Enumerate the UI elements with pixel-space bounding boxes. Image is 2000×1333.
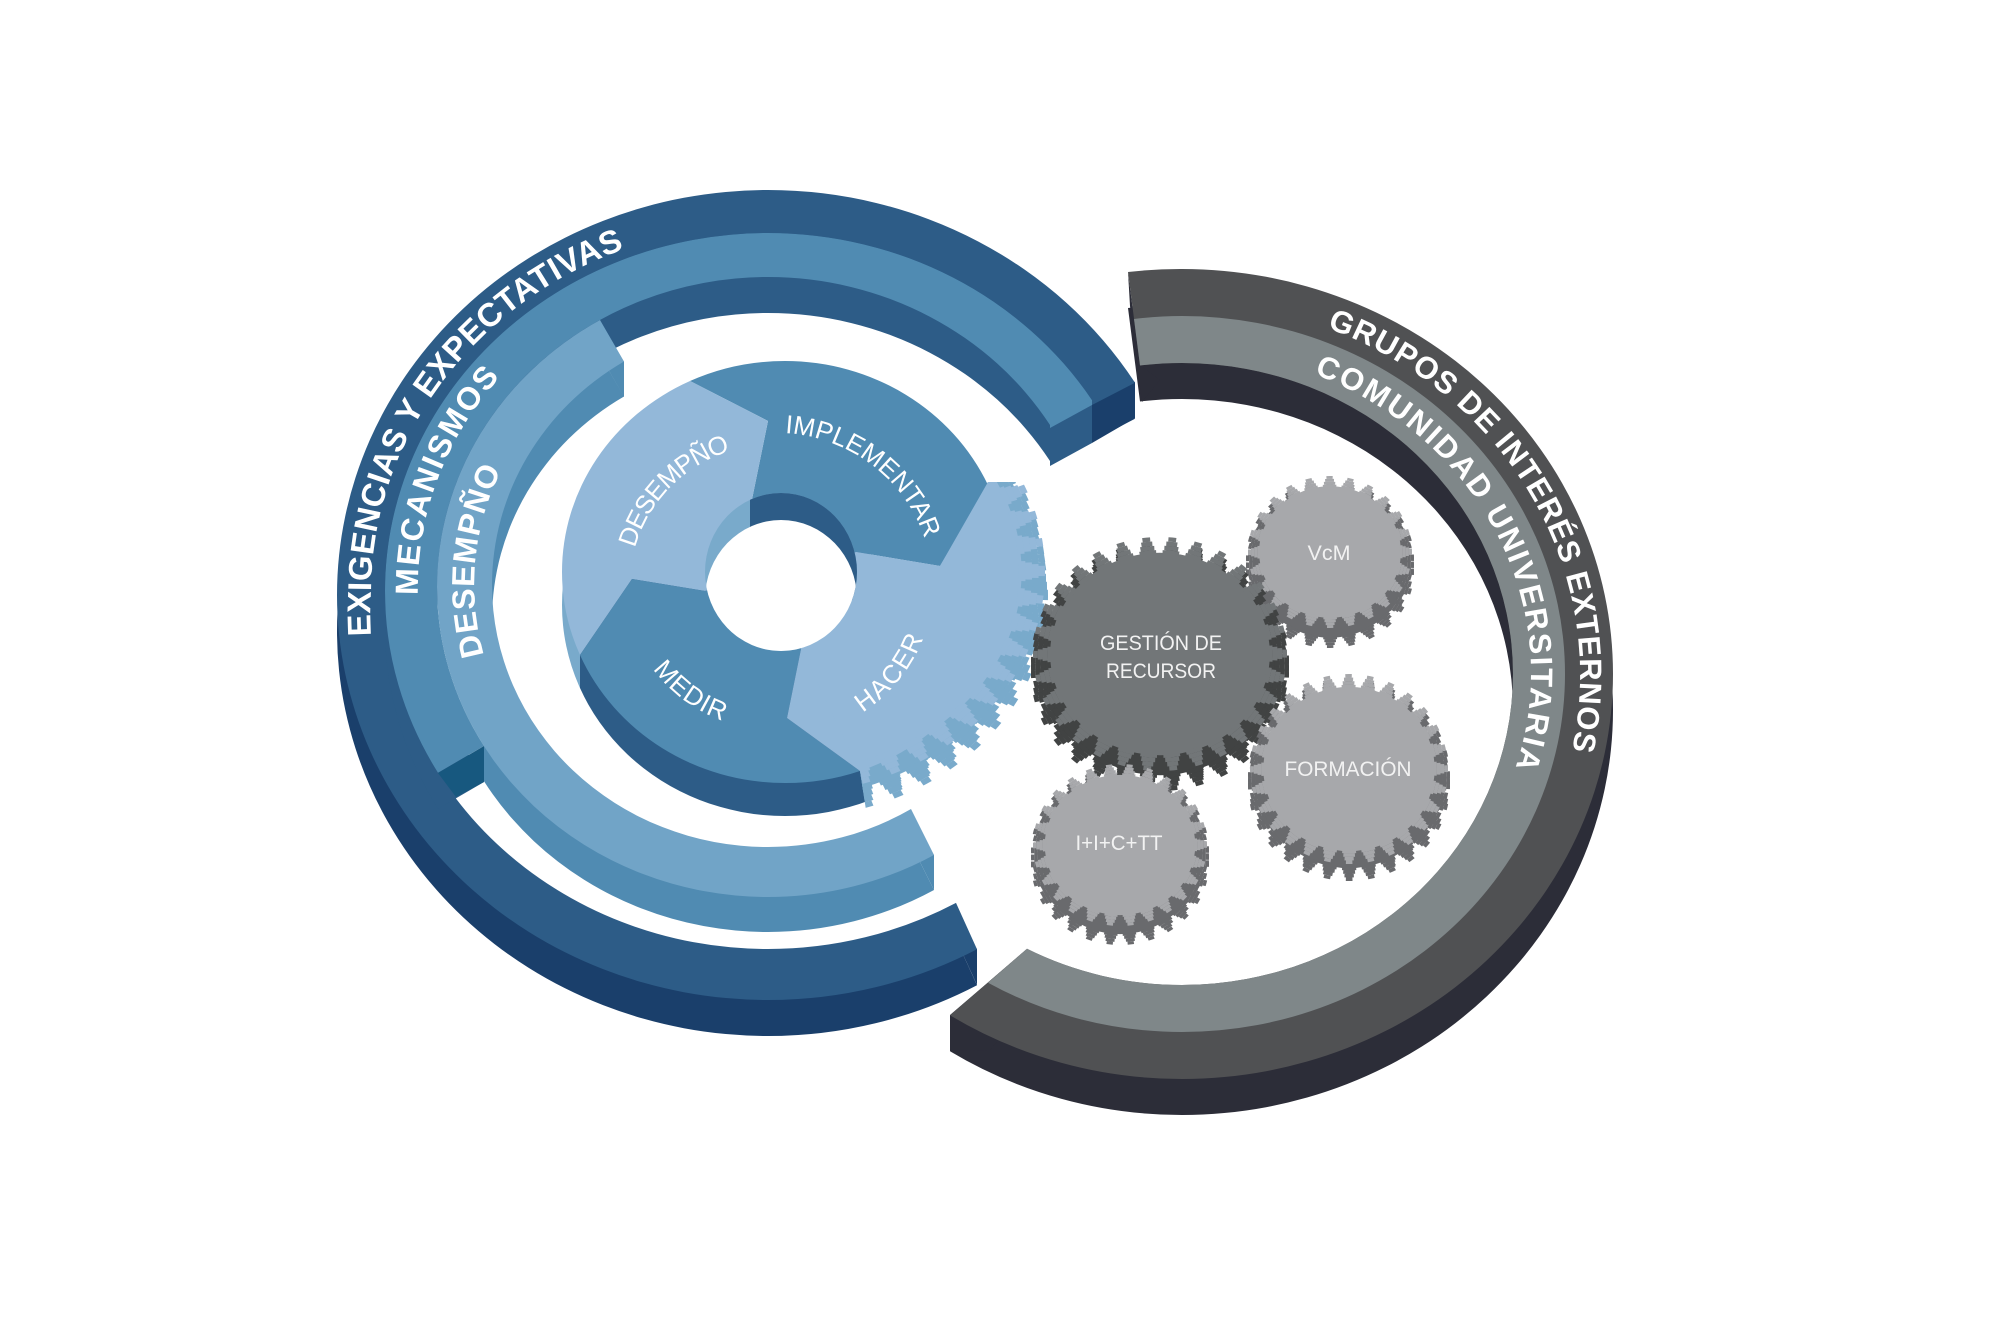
- middle ring: mecanismos: [385, 233, 1092, 773]
- wheel hole: [705, 493, 857, 651]
- gear: formación: FORMACIÓN: [1284, 758, 1412, 781]
- outer ring: exigencias y expectativas: [337, 190, 1135, 1000]
- inner ring: desempeño: [437, 320, 934, 897]
- label: grupos de interés externos: GRUPOS DE INTERÉS EXTERNOS: [1331, 311, 1602, 752]
- sector: medir: [580, 572, 860, 783]
- middle ring end cap: [438, 746, 484, 797]
- sector: hacer: [781, 485, 1008, 771]
- outer ring side wall: [337, 226, 1135, 1036]
- gear: VcM: VcM: [1308, 542, 1350, 565]
- gear: I+I+C+TT: [1033, 766, 1207, 943]
- grey ring side wall: [950, 272, 1613, 1115]
- gear teeth side wall: [860, 482, 1048, 808]
- panel: blue concentric arcs: [337, 190, 1135, 1036]
- gear: VcM: [1248, 477, 1412, 647]
- label: desempeño sector: DESEMPÑO: [618, 436, 727, 546]
- inner ring side wall: [484, 361, 934, 932]
- middle ring side wall: [385, 269, 1092, 809]
- inner ring: comunidad universitaria: [988, 316, 1565, 1032]
- gear: gestión de recursor: GESTIÓN DE: [1100, 632, 1222, 655]
- label: comunidad universitaria: COMUNIDAD UNIVERSITARIA: [1318, 357, 1552, 767]
- gear: gestión de recursor: RECURSOR: [1106, 660, 1216, 683]
- outer ring: grupos de interés externos: [950, 269, 1613, 1079]
- label: desempeño: DESEMPÑO: [452, 465, 498, 658]
- label: implementar: IMPLEMENTAR: [787, 415, 940, 538]
- sector: implementar: [690, 361, 988, 572]
- label: medir: MEDIR: [654, 659, 726, 720]
- label: exigencias y expectativas: EXIGENCIAS Y EXPECTATIVAS: [347, 230, 622, 634]
- wheel side wall: [562, 552, 870, 816]
- sector hacer gear teeth: [856, 482, 1045, 784]
- gear: I+I+C+TT: I+I+C+TT: [1076, 832, 1163, 855]
- label: hacer: HACER: [854, 634, 923, 712]
- gear: gestión de recursor: [1033, 539, 1287, 789]
- label: mecanismos: MECANISMOS: [396, 366, 496, 593]
- sector: desempeño: [562, 381, 781, 655]
- gear: formación: [1250, 676, 1448, 879]
- panel: grey outer arcs: [950, 269, 1613, 1115]
- panel: central cycle wheel: [562, 361, 1048, 816]
